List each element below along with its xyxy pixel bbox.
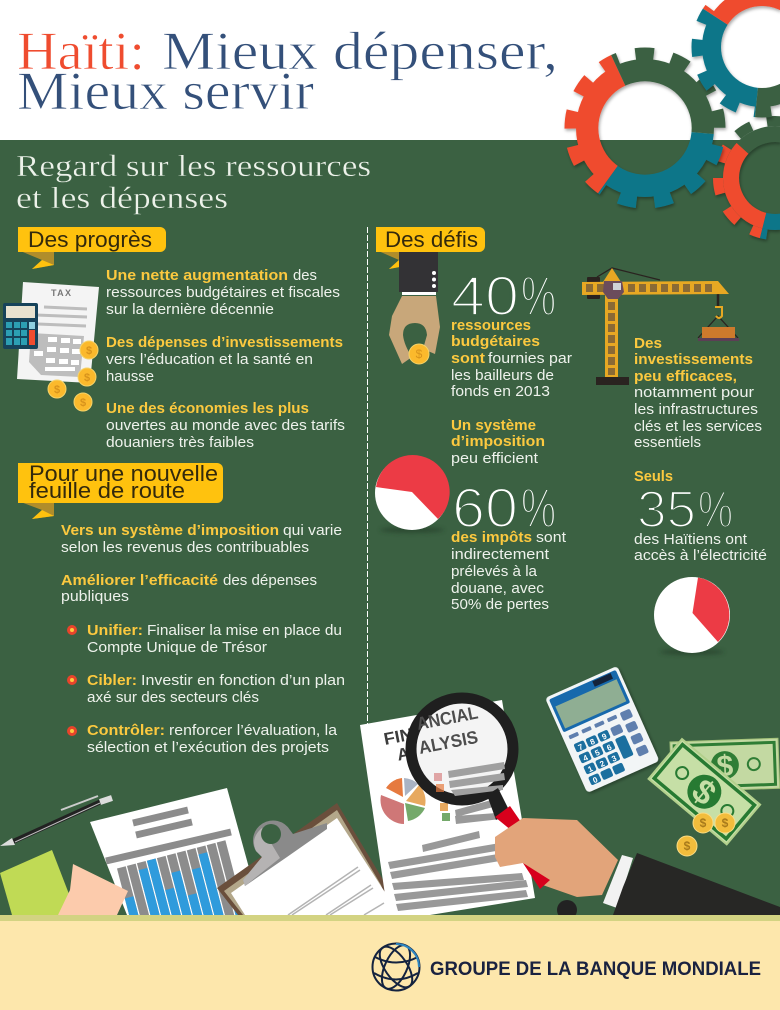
pie chart: 60% [375,455,450,533]
logo: World Bank Group [372,941,761,993]
text block: 60% description [451,530,566,613]
tax table [29,333,84,377]
dashed divider [366,227,368,725]
green background panel [0,140,780,916]
text block: electricity [634,532,767,564]
stat: 60%: % [521,476,556,539]
stat: 40%: % [521,264,556,327]
text block: tax system: d’imposition [451,434,545,450]
tax paper [17,282,99,383]
text block: tax system: Un système [451,418,536,434]
text block: progress: douaniers très faibles [106,435,254,451]
mini pie chart [380,778,426,824]
badge: Des progrès [18,227,166,269]
calculator [3,303,38,349]
bullet list: Compte Unique de Trésor [87,640,267,656]
coins [48,341,98,411]
icon: calculator: 9 [601,731,609,742]
icon: tax form, calculator and coins: $ [54,384,60,396]
text block: 40% description: les bailleurs de [451,368,554,384]
bullet list: renforcer l’évaluation, la [169,723,338,739]
text block: ineffective investments: peu efficaces, [634,369,737,385]
icon: calculator: 2 [598,759,607,769]
bullet list [68,623,345,756]
wordmark: GROUPE DE LA BANQUE MONDIALE [430,958,761,980]
sticky note: green [0,850,74,915]
bullet list: Cibler: [87,673,137,689]
stat: 40%: 40 [451,264,519,327]
stat: 60%: 60 [452,476,518,539]
icon: tax form, calculator and coins: $ [86,345,92,357]
text block: ineffective investments: essentiels [634,435,701,451]
text block: electricity: des Haïtiens ont [634,532,747,548]
text block: roadmap: Améliorer l’efficacité [61,573,218,589]
illustration: desk items [0,788,397,959]
icon: tax form, calculator and coins [3,282,99,411]
text block: 40% description: fonds en 2013 [451,384,550,400]
title: Mieux dépenser, [162,21,558,81]
pie chart: 35% [654,577,730,655]
sticky note: peach [58,864,128,915]
text block: progress: sur la dernière décennie [106,302,274,318]
icon: calculator: 8 [589,737,597,747]
text block: progress: hausse [106,369,154,385]
suit sleeve [613,853,780,915]
text block: ineffective investments: clés et les services [634,419,762,435]
text block: 60% description: 50% de pertes [451,597,549,613]
footer strip [0,915,780,921]
badge: Des progrès: Des progrès [28,227,152,252]
stat: 40% [451,264,556,327]
text block: ineffective investments: les infrastructures [634,402,758,418]
stat: 35%: % [698,481,733,539]
text block: progress: vers l’éducation et la santé en [106,352,313,368]
dark knob [557,900,577,920]
badge: Pour une nouvelle feuille de route: feuille de route [29,478,185,503]
icon: banknotes: $ [722,816,729,830]
text block: 60% description: sont [536,530,566,546]
text block: roadmap [61,523,342,605]
text block: 60% description: des impôts [451,530,532,546]
text block: progress: Une des économies les plus [106,401,309,417]
icon: calculator: 0 [591,775,600,785]
financial paper [360,700,535,915]
icon: calculator: 1 [587,764,595,774]
text block: progress: ouvertes au monde avec des tarifs [106,418,345,434]
footer panel [0,921,780,1010]
text block: ineffective investments [634,336,762,451]
text block: ineffective investments: notamment pour [634,385,754,401]
icon: hand with coin: $ [416,347,423,361]
text block: electricity: accès à l’électricité [634,548,767,564]
text block: progress: ressources budgétaires et fiscales [106,285,340,301]
front banknote: $ [684,772,723,813]
back banknote: $ [716,750,734,783]
title: Mieux servir [17,61,314,121]
text block: roadmap: Vers un système d’imposition [61,523,279,539]
text block: roadmap: des dépenses [223,573,317,589]
icon: pen [0,796,112,846]
text block: roadmap: selon les revenus des contribuables [61,540,309,556]
shirt cuff [603,855,633,908]
icon: crane [582,268,739,385]
text block: progress: Une nette augmentation [106,268,288,284]
bullet list: Contrôler: [87,723,165,739]
text block: 60% description: douane, avec [451,581,544,597]
badge: Des défis [376,227,485,269]
magnifying glass: ALYSIS [417,727,480,758]
icon: calculator: 5 [594,748,602,758]
icon: tax form, calculator and coins: TAX [51,288,71,298]
heading: financial analysis: FINANCIAL [382,712,482,749]
stat: 60% [452,476,556,539]
icon: calculator: 7 [577,742,585,752]
subtitle: et les dépenses [16,180,228,215]
badge: Des défis: Des défis [385,227,478,252]
chart paper [90,788,262,959]
illustration: financial analysis [360,698,780,920]
text block: roadmap: publiques [61,589,129,605]
icon: calculator [545,666,659,793]
text block: ineffective investments: investissements [634,352,753,368]
text block: progress: des [293,268,317,284]
title: Haïti: [17,21,145,81]
icon: calculator: 6 [605,742,614,753]
icon: tax form, calculator and coins: $ [84,372,90,384]
magnifying glass: ANCIAL [415,702,480,734]
badge: Pour une nouvelle feuille de route: Pour une nouvelle [29,461,218,486]
hand holding magnifier [495,818,618,897]
text block: tax system: peu efficient [451,451,538,467]
text block: tax system [451,418,545,467]
heading: financial analysis: ANALYSIS [395,730,482,765]
bullet list: Unifier: [87,623,143,639]
heading: financial analysis [382,712,485,767]
text block: 60% description: prélevés à la [451,564,538,580]
bullet list: Investir en fonction d’un plan [141,673,345,689]
stat: 35% [637,481,733,539]
icon: tax form, calculator and coins: $ [80,397,86,409]
subtitle [16,148,371,215]
icon: calculator: 4 [582,753,590,763]
text block: 60% description: indirectement [451,547,549,563]
bar chart [117,840,249,959]
text block: 40% description [451,318,572,400]
icon: banknotes: $ [684,839,691,853]
clipboard [217,803,397,915]
icon: banknotes [649,738,780,856]
text block: 40% description: ressources [451,318,531,334]
icon: banknotes: $ [700,816,707,830]
title [17,21,558,121]
bullet list: Finaliser la mise en place du [147,623,342,639]
text block: progress [106,268,345,451]
coins [677,813,735,856]
subtitle: Regard sur les ressources [16,148,371,183]
gear: top right [690,0,780,122]
magnifying glass [411,698,532,840]
magnifier handle end [523,863,550,889]
stat: 35%: 35 [637,481,696,539]
label: Seuls: Seuls [634,469,673,485]
badge: Pour une nouvelle feuille de route [18,461,223,519]
text block: 40% description: budgétaires [451,334,540,350]
gear: right [713,116,780,242]
header band [0,0,780,140]
icon: hand with coin [389,252,440,364]
icon: gears [564,0,780,242]
text block: 40% description: fournies par [488,351,572,367]
text block: ineffective investments: Des [634,336,662,352]
text block: roadmap: qui varie [283,523,342,539]
bullet list: sélection et l’exécution des projets [87,740,329,756]
icon: globe [372,941,420,993]
text block: 40% description: sont [451,351,485,367]
bullet list: axé sur des secteurs clés [87,690,259,706]
text block: progress: Des dépenses d’investissements [106,335,343,351]
gear: large [564,48,728,210]
icon: calculator: 3 [610,753,618,764]
